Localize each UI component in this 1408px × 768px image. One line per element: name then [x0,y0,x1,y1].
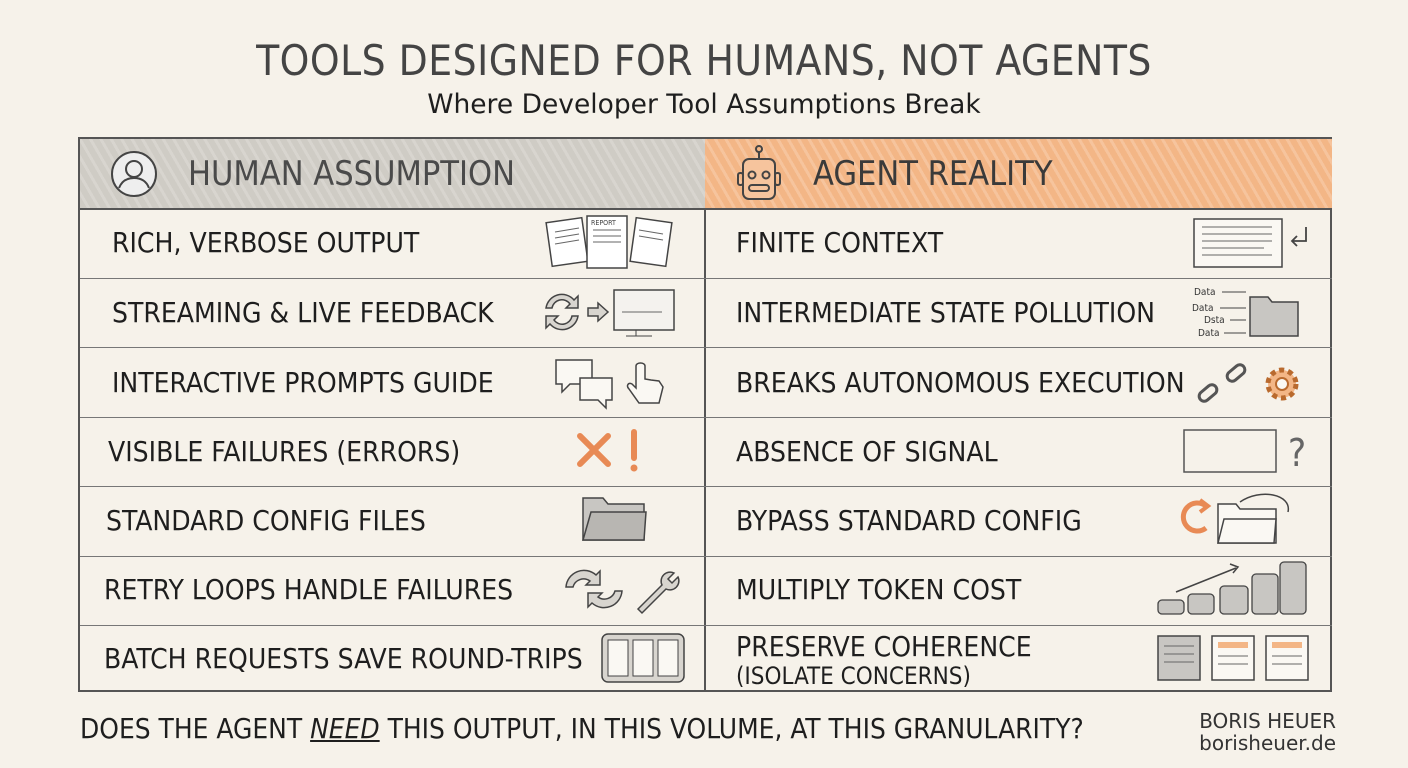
icon: cross and exclamation [577,429,638,472]
icon: coin stacks [1157,561,1307,615]
icon: data to folder: Dsta [1204,315,1225,326]
column divider [704,208,706,692]
row 7 right: PRESERVE COHERENCE [736,630,1032,663]
header: human assumption [80,139,707,210]
icon: empty box question [1183,429,1306,475]
title: TOOLS DESIGNED FOR HUMANS, NOT AGENTS [256,36,1152,85]
icon: chat bubbles and hand [555,359,664,410]
subtitle: Where Developer Tool Assumptions Break [427,89,981,120]
footer question: DOES THE AGENT NEED THIS OUTPUT, IN THIS VOLUME, AT THIS GRANULARITY? [80,712,1084,745]
row lines [80,278,1332,279]
icon: reports [545,215,673,269]
row 2 right: INTERMEDIATE STATE POLLUTION [736,296,1155,329]
icon: data to folder: Data [1192,303,1213,314]
icon: context box [1193,218,1307,268]
icon: refresh to monitor [545,289,675,336]
author credit: borisheuer.de [1199,731,1336,755]
author credit [1199,709,1336,755]
icon: data to folder: Data [1198,328,1219,339]
row 7 left: BATCH REQUESTS SAVE ROUND-TRIPS [104,642,583,675]
header: human assumption: HUMAN ASSUMPTION [188,154,515,194]
header: agent reality: AGENT REALITY [813,154,1053,194]
icon: data to folder [1192,287,1299,339]
row 1 left: RICH, VERBOSE OUTPUT [112,226,419,259]
icon: folder [582,497,647,541]
row 6 left: RETRY LOOPS HANDLE FAILURES [104,573,513,606]
row 4 right: ABSENCE OF SIGNAL [736,435,998,468]
row 6 right: MULTIPLY TOKEN COST [736,573,1021,606]
icon: isolated docs [1157,635,1309,681]
icon: reports: REPORT [591,219,616,227]
row 7 right subtext: (ISOLATE CONCERNS) [736,662,971,690]
table [78,137,1332,692]
row 1 right: FINITE CONTEXT [736,226,943,259]
icon: broken chain and gear [1198,363,1298,403]
row 4 left: VISIBLE FAILURES (ERRORS) [108,435,460,468]
row 5 right: BYPASS STANDARD CONFIG [736,504,1082,537]
icon: data to folder: Data [1194,287,1215,298]
header: agent reality [705,139,1332,210]
icon: robot [737,145,781,200]
row 3 left: INTERACTIVE PROMPTS GUIDE [112,366,494,399]
icon: empty box question: ? [1288,431,1306,475]
icon: batch panels [601,633,685,683]
row 3 right: BREAKS AUTONOMOUS EXECUTION [736,366,1185,399]
icon: bypass folder [1180,494,1290,544]
row 2 left: STREAMING & LIVE FEEDBACK [112,296,494,329]
icon: retry and wrench [565,569,680,614]
author credit: BORIS HEUER [1199,709,1336,733]
icon: person [111,151,157,197]
row 5 left: STANDARD CONFIG FILES [106,504,426,537]
